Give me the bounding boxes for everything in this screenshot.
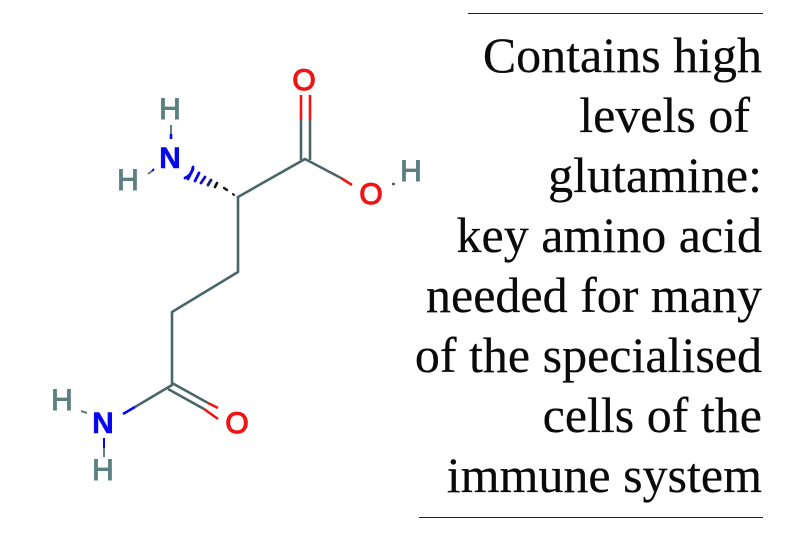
carboxyl group bonds [301, 95, 352, 185]
atom label: amide N and H: N [92, 407, 114, 440]
caption text: glutamine: [548, 147, 762, 203]
N-H bonds, amino group [148, 125, 171, 174]
atom label: amide O: O [225, 407, 249, 440]
amide group bonds [81, 383, 218, 457]
atom label: amide N and H [51, 384, 114, 487]
O-H bond [392, 183, 395, 185]
atom label: hydroxyl O and H: H [400, 155, 422, 188]
caption block with rules [415, 13, 763, 518]
caption text: immune system [447, 447, 762, 503]
atom label: amide N and H: H [92, 454, 114, 487]
atom label: amino N and H: H [117, 164, 139, 197]
caption text: Contains high [483, 27, 762, 83]
caption text: needed for many [426, 267, 762, 323]
atom label: hydroxyl O and H [359, 155, 422, 211]
atom label: amino N and H: N [159, 142, 181, 175]
caption text: of the specialised [415, 327, 762, 383]
caption text: cells of the [543, 387, 762, 443]
bottom rule [419, 517, 763, 518]
atom label: hydroxyl O and H: O [359, 178, 383, 211]
atom label: carbonyl O: O [292, 64, 316, 97]
hashed wedge bond to amino group [185, 167, 234, 195]
chemical structure: glutamine molecule [51, 64, 422, 487]
caption text: levels of [579, 87, 750, 143]
caption text: key amino acid [457, 207, 762, 263]
atom label: amino N and H [117, 93, 181, 197]
carbon backbone bonds [172, 159, 305, 385]
atom label: amide N and H: H [51, 384, 73, 417]
caption text [415, 27, 762, 503]
atom label: amino N and H: H [159, 93, 181, 126]
top rule [468, 13, 763, 14]
